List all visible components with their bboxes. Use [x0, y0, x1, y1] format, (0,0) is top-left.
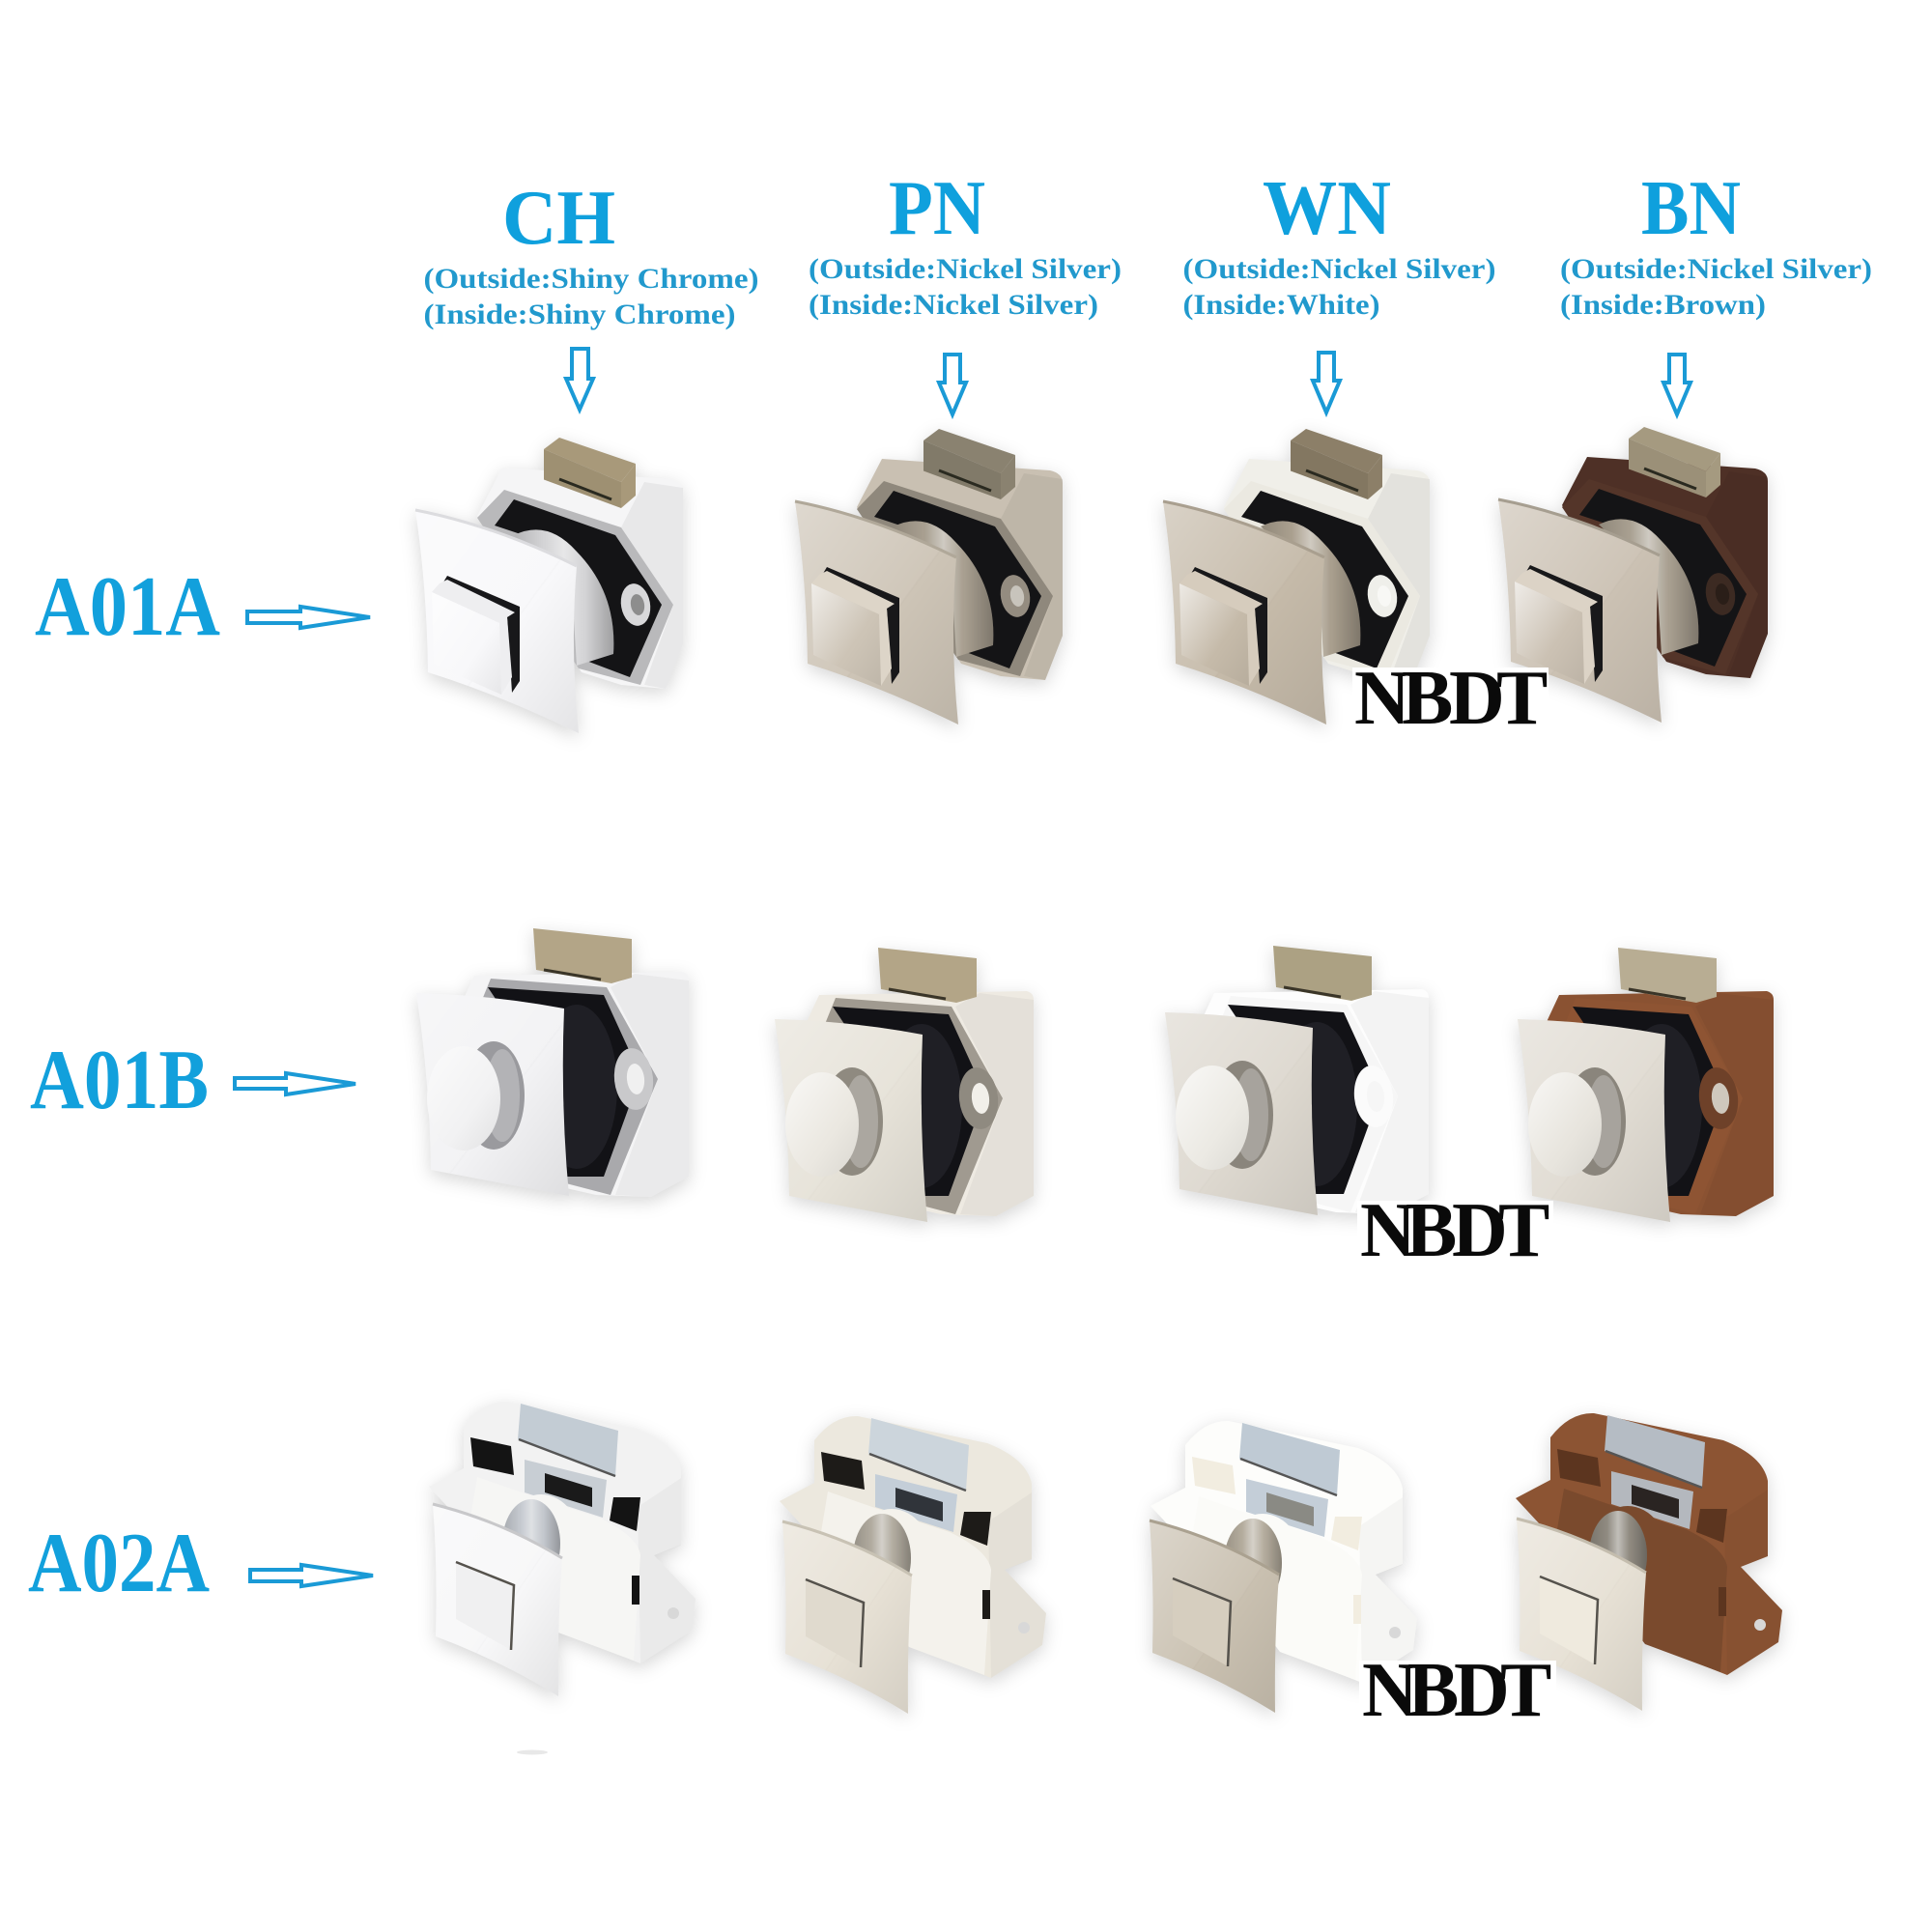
- heading: PN: PN: [889, 166, 985, 251]
- text: BN materials: (Outside:Nickel Silver): [1560, 253, 1872, 285]
- text: CH materials: [423, 263, 759, 330]
- arrow: down to CH: [566, 349, 593, 410]
- product: A01A nickel latch: [795, 429, 1063, 724]
- product: A02A nickel latch: [780, 1416, 1046, 1714]
- product: A01A chrome latch: [415, 438, 683, 733]
- product: A01B chrome latch: [416, 928, 689, 1197]
- heading: WN: WN: [1263, 166, 1391, 251]
- arrow: down to WN: [1313, 353, 1340, 412]
- product: A01B white inside latch: [1165, 946, 1429, 1215]
- arrow: A02A to right: [250, 1565, 373, 1586]
- smudge below chrome A02A latch: [517, 1750, 548, 1754]
- product: A02A white inside latch: [1150, 1421, 1417, 1713]
- row label: A02A: A02A: [28, 1517, 210, 1610]
- text: PN materials: [809, 253, 1122, 321]
- logo: NBDT row 3: NBDT: [1362, 1648, 1551, 1733]
- product: A01A white inside latch: [1163, 429, 1430, 724]
- arrow: A01A to right: [247, 607, 370, 628]
- logo: NBDT row 1: NBDT: [1354, 656, 1548, 741]
- text: BN materials: [1560, 253, 1872, 321]
- product: A01B brown inside latch: [1518, 948, 1774, 1222]
- text: PN materials: (Outside:Nickel Silver): [809, 253, 1122, 285]
- text: WN materials: (Inside:White): [1182, 289, 1379, 321]
- product: A02A chrome latch: [429, 1402, 696, 1696]
- arrow: A01B to right: [235, 1073, 355, 1094]
- product: A01B nickel latch: [775, 948, 1034, 1222]
- text: WN materials: (Outside:Nickel Silver): [1182, 253, 1495, 285]
- heading: CH: CH: [502, 176, 615, 261]
- row label: A01A: A01A: [35, 560, 220, 654]
- arrow: down to BN: [1663, 355, 1690, 414]
- logo: NBDT row 2: NBDT: [1360, 1188, 1549, 1273]
- text: PN materials: (Inside:Nickel Silver): [809, 289, 1098, 321]
- text: WN materials: [1182, 253, 1495, 321]
- text: CH materials: (Outside:Shiny Chrome): [423, 263, 759, 295]
- row label: A01B: A01B: [30, 1034, 209, 1127]
- text: BN materials: (Inside:Brown): [1560, 289, 1766, 321]
- text: CH materials: (Inside:Shiny Chrome): [423, 298, 736, 330]
- arrow: down to PN: [939, 355, 966, 414]
- product: A01A brown inside latch: [1498, 427, 1768, 723]
- product: A02A brown inside latch: [1516, 1413, 1782, 1711]
- heading: BN: BN: [1641, 166, 1741, 251]
